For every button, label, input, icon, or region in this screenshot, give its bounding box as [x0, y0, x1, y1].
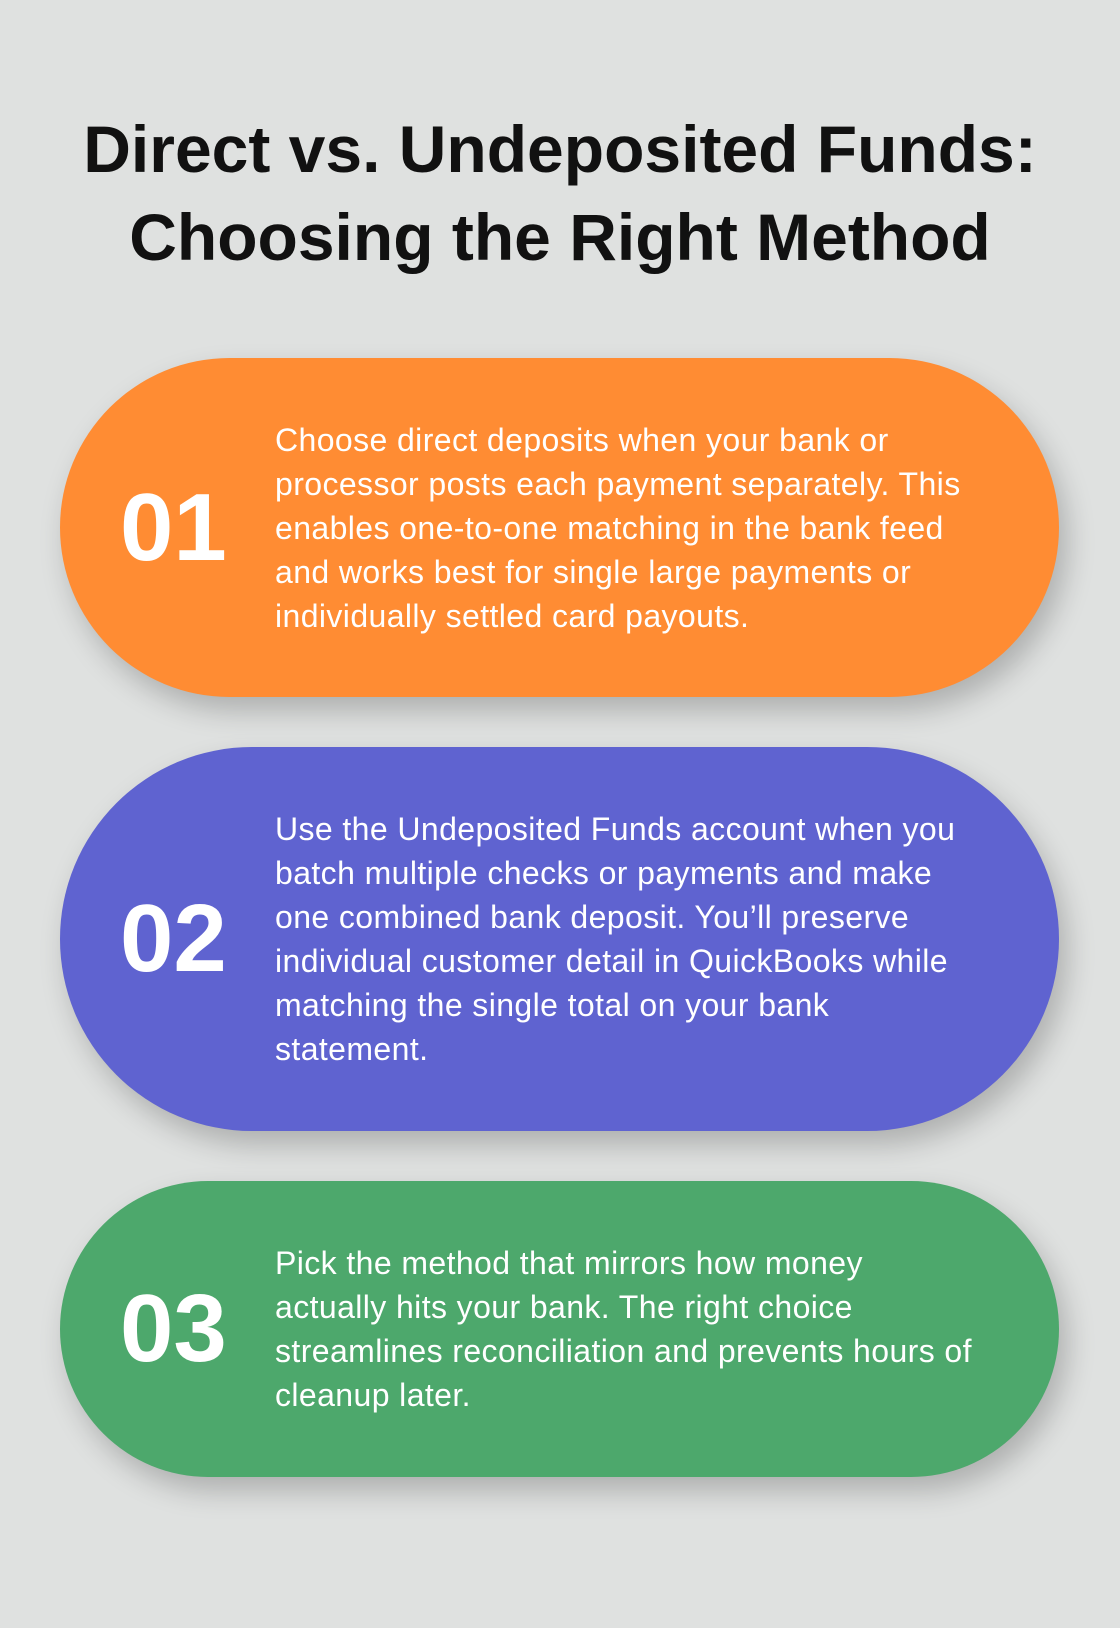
- text block 03: cleanup later.: [275, 1377, 471, 1413]
- text block 01: and works best for single large payments or: [275, 554, 911, 590]
- text block 02: one combined bank deposit. You’ll preserve: [275, 899, 909, 935]
- text block 02: statement.: [275, 1031, 428, 1067]
- number 02: 02: [120, 885, 227, 992]
- number 01: 01: [120, 474, 227, 580]
- text block 01: processor posts each payment separately. This: [275, 466, 961, 502]
- text block 03: Pick the method that mirrors how money: [275, 1245, 863, 1281]
- text block 02: Use the Undeposited Funds account when you: [275, 811, 955, 847]
- text block 02: matching the single total on your bank: [275, 987, 829, 1023]
- text block 01: enables one-to-one matching in the bank feed: [275, 510, 944, 546]
- text block 02: [275, 811, 955, 1067]
- text block 02: individual customer detail in QuickBooks while: [275, 943, 948, 979]
- title: Choosing the Right Method: [129, 200, 991, 274]
- text block 03: streamlines reconciliation and prevents hours of: [275, 1333, 972, 1369]
- text block 01: individually settled card payouts.: [275, 598, 749, 634]
- title: Direct vs. Undeposited Funds:: [83, 112, 1037, 186]
- text block 03: [275, 1245, 972, 1413]
- number 03: 03: [120, 1275, 227, 1382]
- panel: card 01: [60, 358, 1059, 697]
- text block 01: [275, 422, 961, 634]
- text block 03: actually hits your bank. The right choice: [275, 1289, 853, 1325]
- text block 02: batch multiple checks or payments and make: [275, 855, 932, 891]
- panel: card 02: [60, 747, 1059, 1131]
- panel: card 03: [60, 1181, 1059, 1477]
- text block 01: Choose direct deposits when your bank or: [275, 422, 889, 458]
- title: [83, 112, 1037, 274]
